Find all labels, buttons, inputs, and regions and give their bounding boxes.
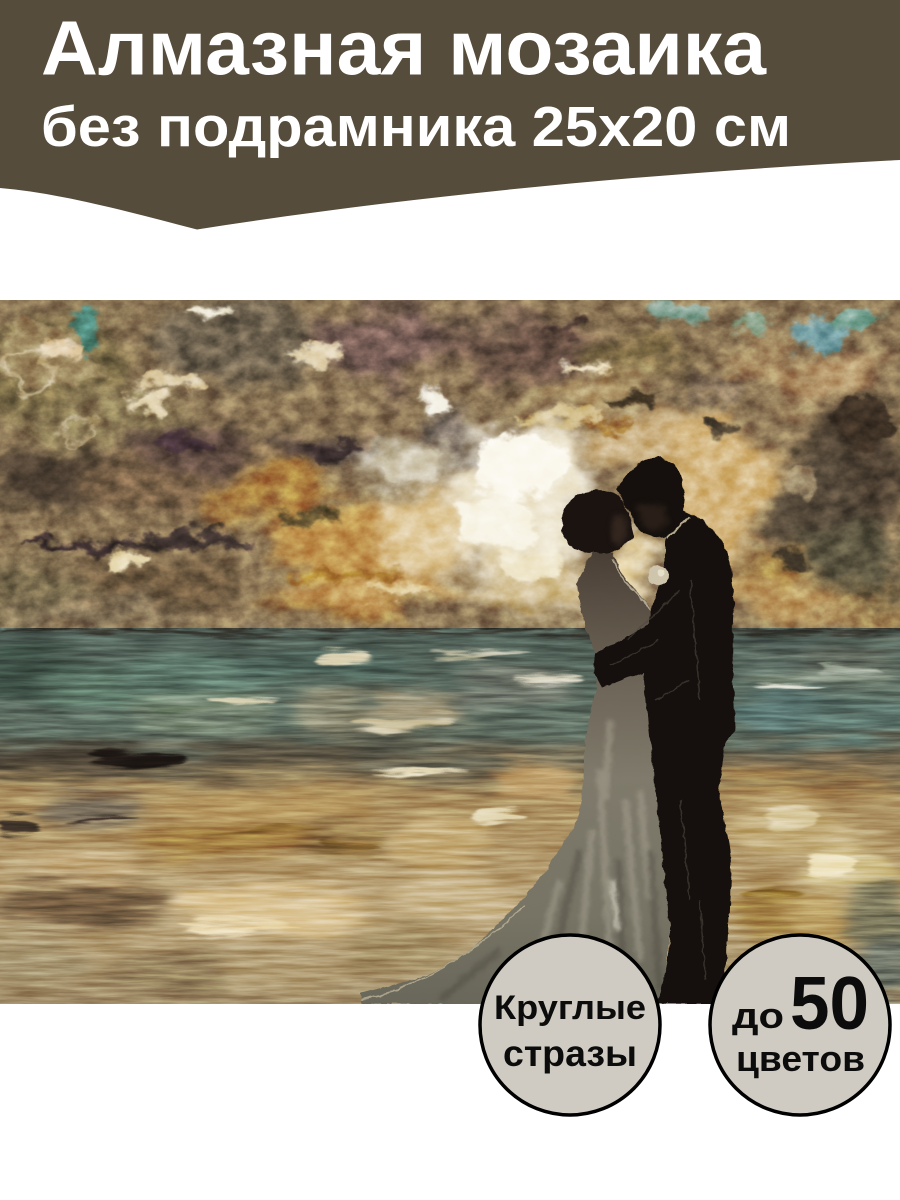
header banner [0,0,900,230]
painting: bride [360,553,670,1004]
title: Алмазная мозаика [41,6,767,92]
badge: up to 50 colours: цветов [736,1038,865,1079]
badge: up to 50 colours: 50 [790,961,869,1045]
painting: boutonniere [648,565,668,585]
painting: sky [0,300,900,628]
badge: up to 50 colours: до [732,995,784,1036]
badge: up to 50 colours [710,935,890,1115]
badge: round rhinestones [480,935,660,1115]
painting: brush texture on sea and sand [0,628,900,1004]
painting: bride's head [562,490,634,553]
painting: sea and sand [0,628,900,1004]
badge: round rhinestones: стразы [503,1033,637,1074]
badge: round rhinestones: Круглые [494,989,646,1027]
painting: brush texture on sky [0,300,900,628]
painting: groom [593,458,735,1004]
painting: couple on the beach at sunset [0,300,900,1004]
subtitle: без подрамника 25х20 см [41,95,791,159]
